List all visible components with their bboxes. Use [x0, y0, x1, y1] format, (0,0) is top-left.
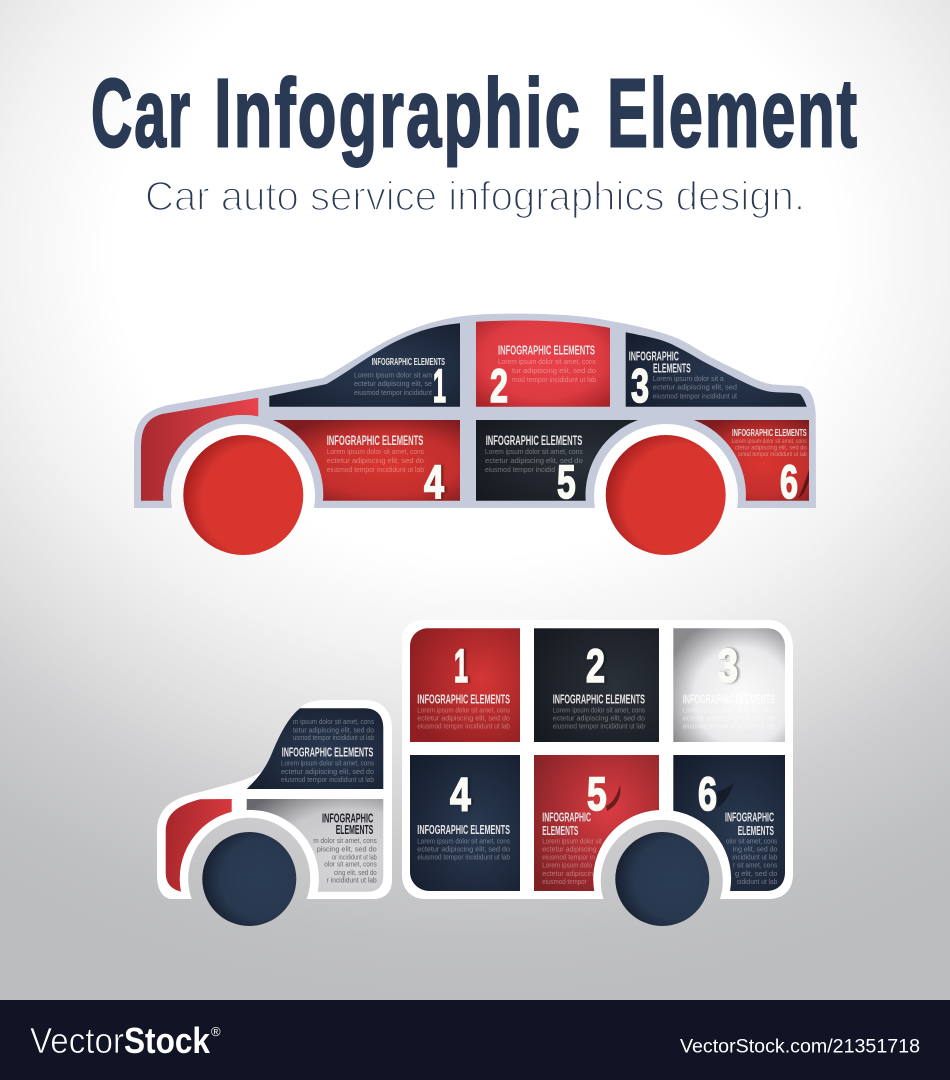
box panel 2	[534, 628, 659, 742]
cab wheel	[202, 832, 296, 926]
panel 5: 5	[557, 455, 576, 508]
cab lower panel	[247, 799, 383, 892]
rear wheel	[606, 435, 726, 555]
panel 4: eiusmod tempor incididunt ut lab	[327, 465, 424, 474]
box panel 1: ectetur adipiscing elit, sed do	[417, 714, 510, 723]
cab fender panel	[166, 799, 232, 892]
panel 6: smod tempor incididunt ut lab	[738, 452, 807, 458]
box panel 5: Lorem ipsum dolo	[542, 860, 592, 869]
box panel 5: ectetur adipiscin	[542, 869, 593, 878]
box panel 5: ectetur adipiscing	[542, 845, 597, 854]
box panel 2: INFOGRAPHIC ELEMENTS	[553, 691, 645, 706]
panel 3: Lorem ipsum dolor sit a	[653, 374, 725, 383]
panel 2: Lorem ipsum dolor sit amet, cons	[498, 357, 596, 366]
cab lower panel: or incididunt ut lab	[332, 852, 377, 861]
panel 4: 4	[424, 455, 444, 508]
panel 3: ELEMENTS	[653, 361, 691, 376]
sedan car infographic	[134, 314, 816, 555]
box panel 6: ing elit, sed do	[733, 845, 777, 854]
panel 1	[269, 323, 460, 412]
panel 2: mod tempor incididunt ut lab	[512, 375, 596, 384]
footer bar	[0, 1000, 950, 1080]
footer logo: Vector	[30, 1020, 124, 1061]
box panel 1: eiusmod tempor incididunt ut lab	[417, 722, 510, 731]
panel 5: eiusmod tempor incidid	[485, 465, 555, 474]
box panel 2: 2	[586, 639, 605, 692]
panel 3: eiusmod tempor incididunt ut	[653, 391, 737, 400]
box panel 6: INFOGRAPHIC	[725, 810, 774, 825]
box panel 6: r sit amet, cons	[733, 860, 778, 869]
panel 1: ectetur adipiscing elit, se	[354, 379, 432, 388]
panel 6: 6	[780, 455, 798, 508]
box panel 4: INFOGRAPHIC ELEMENTS	[417, 822, 510, 837]
panel 4: ectetur adipiscing elit, sed do	[327, 456, 424, 465]
cab upper panel: eiusmod tempor incididunt ut lab	[281, 775, 374, 784]
box panel 6: g elit, sed do	[735, 869, 777, 878]
panel 1: Lorem ipsum dolor sit am	[354, 371, 432, 380]
panel 2: tur adipiscing elit, sed do	[512, 366, 596, 375]
box panel 4: Lorem ipsum dolor sit amet, cons	[417, 836, 510, 845]
cab outline	[157, 700, 392, 899]
panel 3: ectetur adipiscing elit, sed	[653, 383, 737, 392]
box panel 5: eiusmod tempor	[542, 877, 587, 886]
cab lower panel: olor sit amet, cons	[324, 860, 377, 869]
box panel 4	[410, 755, 520, 891]
box panel 1: 1	[454, 639, 468, 692]
title: Infographic	[214, 58, 582, 168]
box panel 5: eiusmod tempor in	[542, 852, 595, 861]
box panel 3: INFOGRAPHIC ELEMENTS	[683, 691, 775, 706]
box panel 1	[410, 628, 520, 742]
panel 2	[476, 321, 610, 412]
cab upper panel: usmod tempor incididunt ut lab	[293, 733, 374, 742]
box wheel	[615, 832, 709, 926]
cab upper panel: Lorem ipsum dolor sit amet, cons	[281, 759, 374, 768]
box body outline	[402, 620, 793, 899]
box panel 2: ectetur adipiscing elit, sed do	[553, 714, 645, 723]
cab upper panel: m ipsum dolor sit amet, cons	[293, 717, 374, 726]
box panel 5: 5	[587, 767, 607, 820]
box panel 2: eiusmod tempor incididunt ut lab	[553, 722, 645, 731]
box panel 4: ectetur adipiscing elit, sed do	[417, 845, 510, 854]
cab lower panel: m dolor sit amet, cons	[313, 836, 377, 845]
box panel 4: 4	[450, 768, 471, 821]
front wheel	[183, 435, 303, 555]
box panel 5: ELEMENTS	[542, 823, 578, 838]
panel 4	[273, 420, 460, 508]
box panel 6: 6	[698, 767, 717, 820]
box panel 3	[673, 628, 785, 742]
panel 6: ctetur adipiscing elit, sed do	[735, 446, 807, 452]
box panel 6: olor sit amet, cons	[726, 836, 778, 845]
panel 5: INFOGRAPHIC ELEMENTS	[486, 433, 582, 448]
box panel 6: incididunt ut lab	[732, 852, 777, 861]
subtitle: Car auto service infographics design.	[145, 173, 805, 219]
panel 2: 2	[490, 359, 508, 412]
box panel 3: 3	[718, 639, 738, 692]
truck infographic	[157, 620, 793, 926]
panel 4: Lorem ipsum dolor sit amet, cons	[327, 447, 424, 456]
footer image id: VectorStock.com/21351718	[680, 1037, 920, 1058]
panel 3	[626, 332, 807, 412]
cab upper panel: INFOGRAPHIC ELEMENTS	[282, 745, 373, 760]
cab upper panel: tetur adipiscing elit, sed do	[293, 725, 374, 734]
box panel 5	[534, 755, 659, 891]
panel 5	[476, 420, 638, 508]
footer logo: ®	[211, 1024, 221, 1039]
footer logo	[30, 1020, 221, 1061]
box panel 1: Lorem ipsum dolor sit amet, cons	[417, 705, 510, 714]
cab lower panel: INFOGRAPHIC	[322, 811, 374, 826]
panel 5: ectetur adipiscing elit, sed do	[485, 456, 583, 465]
panel 4: INFOGRAPHIC ELEMENTS	[327, 433, 423, 448]
box panel 6: cididunt ut lab	[737, 877, 777, 886]
footer logo: Stock	[124, 1020, 211, 1061]
cab lower panel: cing elit, sed do	[334, 868, 377, 877]
box panel 5: Lorem ipsum dolor sit	[542, 836, 602, 845]
panel 2: INFOGRAPHIC ELEMENTS	[498, 342, 595, 358]
cab lower panel: r incididunt ut lab	[327, 876, 377, 885]
panel 1: eiusmod tempor incididunt	[354, 388, 432, 397]
cab upper panel: ectetur adipiscing elit, sed do	[281, 767, 374, 776]
title: Car	[91, 58, 192, 168]
panel 3: 3	[631, 359, 649, 412]
panel 5: Lorem ipsum dolor sit amet, cons	[485, 447, 583, 456]
panel 1: 1	[433, 359, 446, 412]
box panel 6: ELEMENTS	[738, 823, 774, 838]
box panel 3: Lorem ipsum dolor sit amet, cons	[683, 705, 775, 714]
box panel 2: Lorem ipsum dolor sit amet, cons	[553, 705, 645, 714]
panel 6: INFOGRAPHIC ELEMENTS	[732, 428, 807, 439]
box panel 4: eiusmod tempor incididunt ut lab	[417, 852, 510, 861]
fender panel	[141, 398, 258, 501]
cab lower panel: ELEMENTS	[336, 822, 373, 837]
cab lower panel: piscing elit, sed do	[317, 845, 377, 854]
panel 3: INFOGRAPHIC	[629, 349, 679, 364]
panel 6	[694, 420, 809, 508]
panel 1: INFOGRAPHIC ELEMENTS	[372, 357, 445, 368]
box panel 6	[673, 755, 785, 891]
box panel 1: INFOGRAPHIC ELEMENTS	[417, 691, 510, 706]
box panel 5: INFOGRAPHIC	[542, 810, 591, 825]
cab upper panel	[247, 708, 383, 789]
car body outline	[134, 314, 816, 508]
panel 6: Lorem ipsum dolor sit amet, cons	[732, 439, 807, 445]
box panel 3: ectetur adipiscing elit, sed do	[683, 714, 775, 723]
box panel 3: eiusmod tempor incididunt ut lab	[683, 722, 775, 731]
